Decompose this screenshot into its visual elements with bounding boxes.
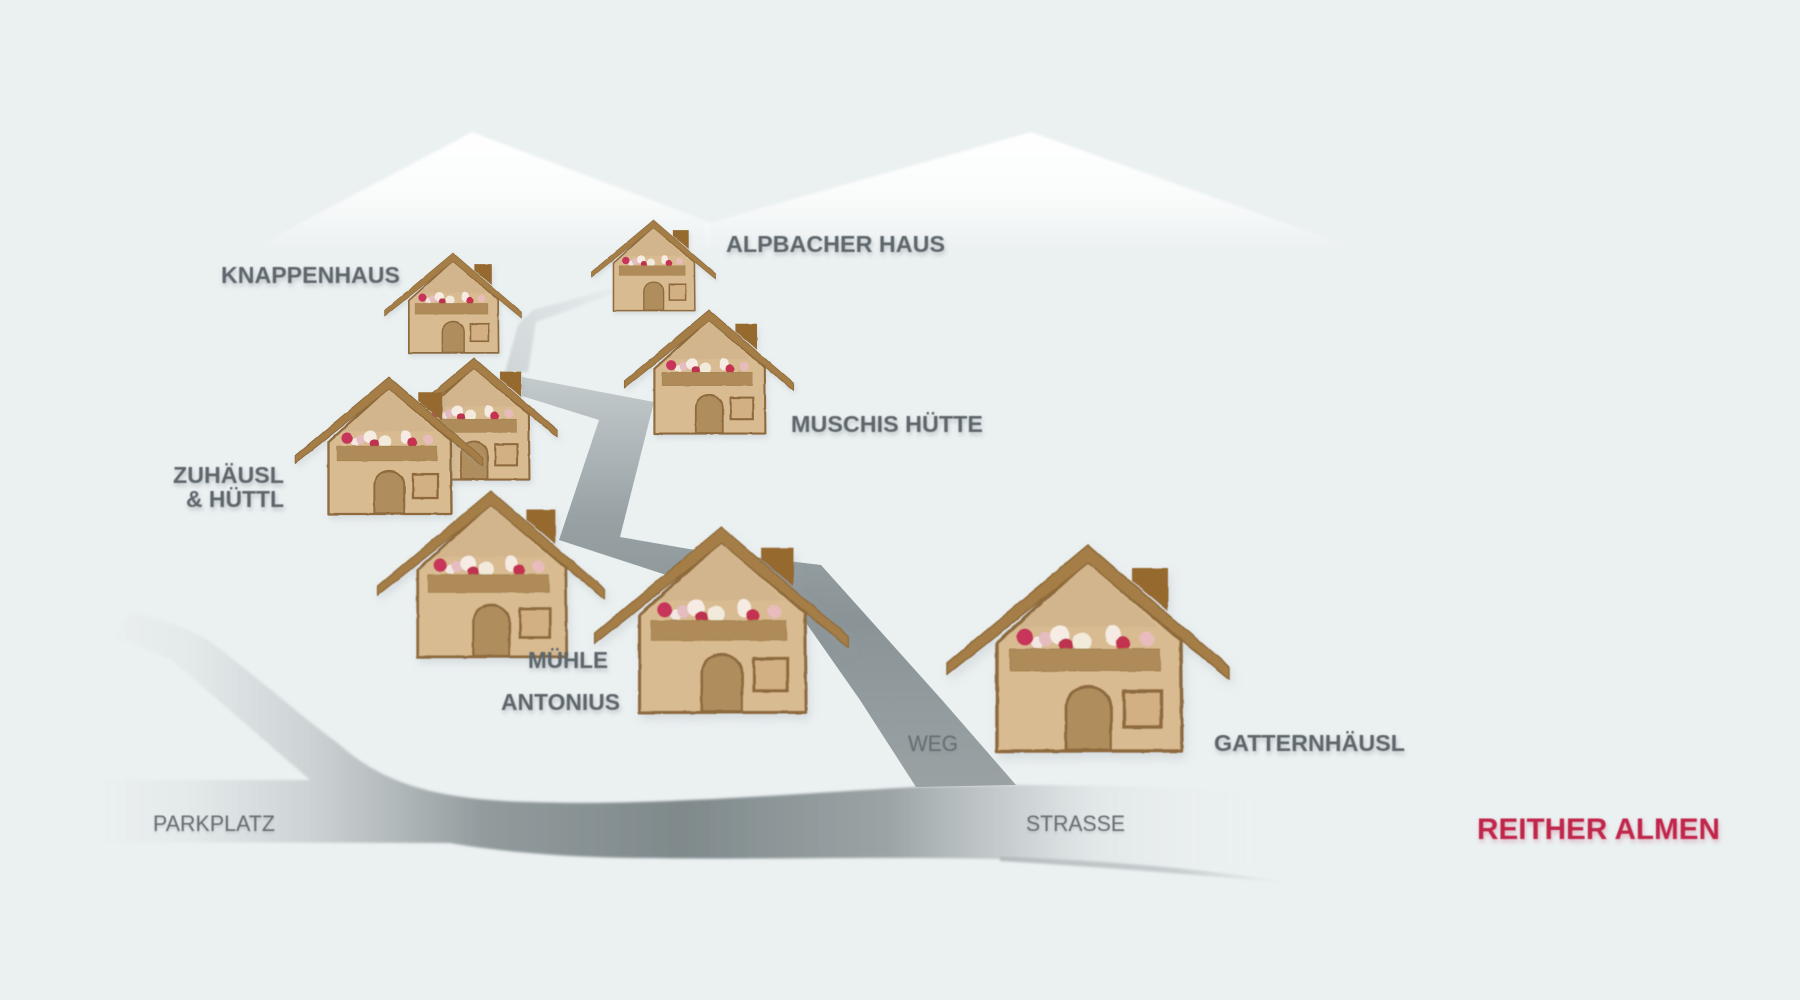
label: Muschis Hütte: MUSCHIS HÜTTE (791, 411, 983, 437)
house: Hüttl (391, 358, 557, 480)
label: Alpbacher Haus: ALPBACHER HAUS (726, 231, 945, 257)
house: Mühle (377, 491, 605, 657)
road edge streak (1000, 857, 1291, 883)
house: Knappenhaus (385, 253, 521, 353)
house: Alpbacher Haus (591, 220, 716, 311)
house: Antonius (595, 527, 848, 712)
label: Zuhäusl & Hüttl: ZUHÄUSL (173, 462, 284, 488)
road: Strasse and Parkplatz (95, 612, 1270, 872)
house: Zuhäusl (295, 377, 483, 514)
label: Mühle: MÜHLE (528, 647, 608, 673)
label: Strasse: STRASSE (1026, 811, 1125, 836)
title: Reither Almen: REITHER ALMEN (1477, 813, 1720, 846)
label: Zuhäusl & Hüttl: & HÜTTL (186, 486, 284, 512)
label: Parkplatz: PARKPLATZ (153, 811, 275, 836)
upper footpath (505, 288, 613, 372)
label: Antonius: ANTONIUS (501, 689, 620, 715)
mountains (246, 132, 1366, 252)
house: Gatternhäusl (947, 545, 1229, 751)
label: Gatternhäusl: GATTERNHÄUSL (1214, 730, 1405, 756)
label: Zuhäusl & Hüttl (173, 462, 284, 512)
house: Muschis Hütte (624, 310, 794, 434)
label: Knappenhaus: KNAPPENHAUS (221, 262, 400, 288)
footpath: Weg (522, 377, 1016, 787)
label: Weg: WEG (908, 731, 958, 756)
